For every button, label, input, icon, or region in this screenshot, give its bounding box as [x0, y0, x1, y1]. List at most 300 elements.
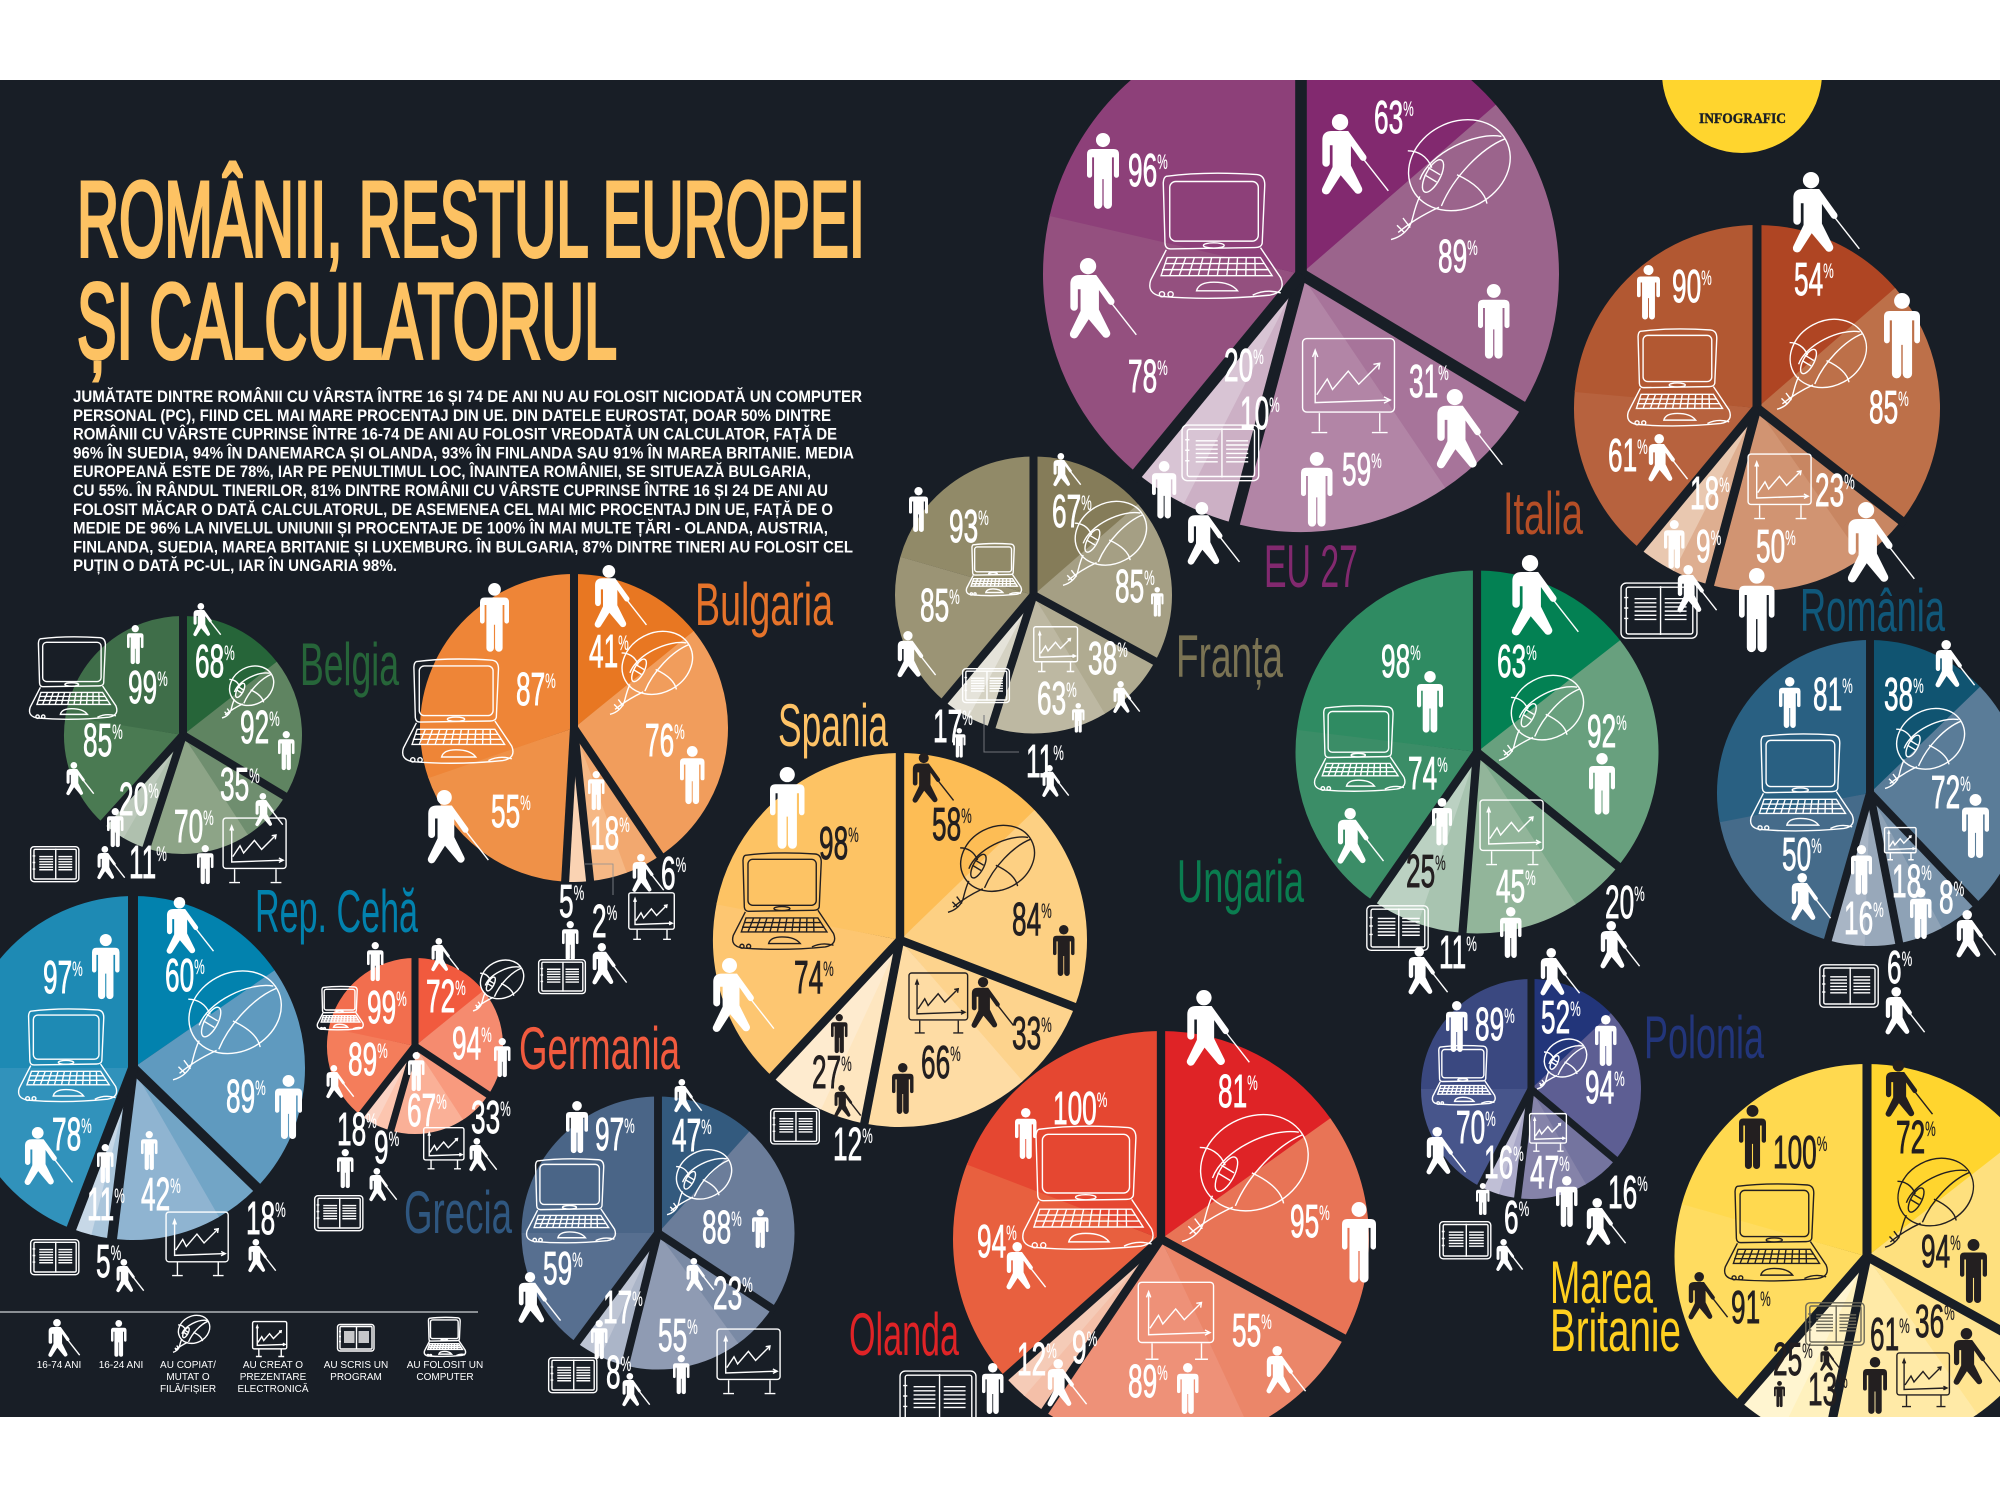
legend item: 16-74 ani [37, 1319, 81, 1371]
Rep. Cehă percentages: % [114, 1185, 125, 1208]
Polonia percentages: 16 [1484, 1136, 1513, 1188]
Bulgaria percentages: 87 [516, 663, 545, 715]
legend item: au copiat: MUTAT O [166, 1372, 210, 1383]
intro text block [73, 387, 862, 575]
România percentages: 6 [1887, 941, 1902, 993]
Polonia percentages: 94 [1585, 1061, 1614, 1113]
Spania percentages: 98 [819, 817, 848, 869]
panel: Ungaria pie [1315, 555, 1645, 994]
Polonia percentages: % [1504, 1005, 1515, 1028]
Spania percentages: 84 [1012, 893, 1041, 945]
Marea Britanie percentages: % [1817, 1133, 1827, 1156]
România percentages: 72 [1931, 766, 1960, 818]
panel: Marea Britanie pie [1688, 1058, 2000, 1450]
Olanda icons [900, 990, 1376, 1426]
Grecia percentages: % [701, 1116, 712, 1139]
Belgia percentages: % [224, 642, 235, 665]
heading: Germania: Germania [519, 1015, 680, 1082]
Franța percentages: % [949, 586, 960, 609]
Ungaria percentages: % [1410, 642, 1421, 665]
România percentages: 8 [1939, 871, 1954, 923]
Germania percentages: 9 [374, 1121, 389, 1173]
Olanda percentages: % [1097, 1089, 1107, 1112]
Polonia percentages: 52 [1541, 991, 1570, 1043]
Marea Britanie wedges [1731, 1058, 2000, 1450]
Germania percentages [337, 970, 511, 1173]
Ungaria percentages: 74 [1408, 747, 1437, 799]
EU 27 percentages: % [1253, 346, 1264, 369]
Germania percentages: % [481, 1024, 492, 1047]
Franța wedges [936, 452, 1159, 731]
România percentages: 16 [1844, 892, 1873, 944]
Franța percentages: 67 [1052, 485, 1081, 537]
intro text block: PUȚIN O DATĂ PC-UL, IAR ÎN UNGARIA 98%. [73, 556, 397, 575]
Ungaria percentages: % [1634, 883, 1645, 906]
intro text block: FOLOSIT MĂCAR O DATĂ CALCULATORUL, DE ASEMENEA CEL MAI MIC PROCENTAJ DIN UE, FAȚĂ DE O [73, 500, 833, 519]
Franța percentages: 85 [920, 579, 949, 631]
Grecia percentages: % [624, 1115, 635, 1138]
Marea Britanie percentages: 25 [1773, 1333, 1802, 1385]
Bulgaria percentages: % [676, 854, 686, 877]
Rep. Cehă percentages: 18 [246, 1192, 275, 1244]
România percentages: 81 [1813, 668, 1842, 720]
Bulgaria percentages: % [607, 902, 617, 925]
Polonia percentages: 89 [1475, 998, 1504, 1050]
Italia percentages: 18 [1690, 467, 1719, 519]
intro text block: MEDIE DE 96% LA NIVELUL UNIUNII ȘI PROCENTAJE DE 100% ÎN MAI MULTE ȚĂRI - OLANDA, AUSTRIA, [73, 519, 828, 538]
Polonia percentages: 47 [1530, 1146, 1559, 1198]
Italia percentages: 90 [1672, 260, 1701, 312]
heading: Ungaria: Ungaria [1177, 848, 1304, 915]
Polonia percentages: 6 [1504, 1191, 1519, 1243]
Marea Britanie percentages: % [1802, 1340, 1813, 1363]
Bulgaria percentages: 76 [645, 714, 674, 766]
title [77, 159, 865, 381]
heading: Spania: Spania [778, 692, 888, 759]
Ungaria icons [1315, 555, 1640, 994]
Germania percentages: % [366, 1110, 377, 1133]
heading: Marea Britanie: Marea [1550, 1249, 1653, 1316]
Italia percentages: % [1823, 260, 1834, 283]
Bulgaria percentages: % [574, 882, 584, 905]
Germania percentages: 89 [348, 1033, 377, 1085]
Italia percentages: 9 [1696, 520, 1711, 572]
Italia percentages: 61 [1608, 429, 1637, 481]
Marea Britanie percentages: % [1760, 1288, 1771, 1311]
Italia percentages: % [1898, 388, 1909, 411]
panel: Polonia pie [1426, 948, 1648, 1271]
EU 27 percentages: % [1269, 394, 1280, 417]
Italia percentages: % [1701, 267, 1712, 290]
România percentages: % [1913, 675, 1924, 698]
România percentages: 50 [1782, 828, 1811, 880]
legend item: au copiat: AU COPIAT/ [160, 1360, 216, 1371]
Rep. Cehă percentages: % [81, 1115, 92, 1138]
Spania percentages: % [862, 1125, 873, 1148]
Rep. Cehă percentages: 5 [96, 1235, 111, 1287]
Bulgaria percentages: 41 [589, 625, 618, 677]
Rep. Cehă percentages: % [255, 1077, 266, 1100]
Polonia wedges [1453, 976, 1618, 1201]
legend item: au copiat: FILĂ/FIȘIER [160, 1382, 216, 1395]
Franța percentages: % [962, 707, 973, 730]
Polonia percentages: % [1637, 1173, 1648, 1196]
Rep. Cehă percentages: % [275, 1199, 286, 1222]
heading: Grecia: Grecia [404, 1179, 512, 1246]
Grecia percentages: % [742, 1274, 753, 1297]
Grecia percentages: 88 [702, 1201, 731, 1253]
Franța percentages: % [1066, 679, 1077, 702]
Rep. Cehă percentages: 11 [87, 1178, 114, 1230]
Olanda percentages: 89 [1128, 1355, 1157, 1407]
Italia percentages: 85 [1869, 381, 1898, 433]
Olanda percentages: 94 [977, 1215, 1006, 1267]
Belgia percentages: % [203, 807, 214, 830]
Ungaria percentages: 92 [1587, 705, 1616, 757]
Rep. Cehă percentages: % [72, 958, 83, 981]
Marea Britanie percentages [1731, 1111, 1961, 1415]
Italia percentages: 50 [1756, 520, 1785, 572]
Polonia percentages: % [1614, 1068, 1625, 1091]
Marea Britanie percentages: 72 [1896, 1111, 1925, 1163]
Olanda percentages: % [1046, 1340, 1057, 1363]
Italia wedges [1628, 220, 1906, 590]
Polonia percentages: % [1570, 998, 1581, 1021]
România percentages: 18 [1892, 855, 1921, 907]
heading: Franța: Franța [1176, 623, 1283, 690]
Spania percentages: % [1041, 1014, 1052, 1037]
Polonia percentages: % [1559, 1153, 1570, 1176]
Bulgaria percentages: % [520, 792, 531, 815]
Spania percentages: 33 [1012, 1007, 1041, 1059]
Bulgaria percentages: 55 [491, 785, 520, 837]
legend item: 16-24 ani [99, 1320, 143, 1371]
Grecia percentages: 17 [603, 1281, 632, 1333]
Grecia percentages: 8 [606, 1346, 621, 1398]
Grecia percentages: % [687, 1316, 698, 1339]
legend item: au copiat [160, 1310, 216, 1395]
Ungaria wedges [1349, 565, 1622, 938]
Bulgaria wedges [466, 569, 682, 886]
Bulgaria percentages: 2 [592, 895, 607, 947]
Olanda percentages: 12 [1017, 1333, 1046, 1385]
Spania wedges [768, 747, 1080, 1129]
panel: Bulgaria pie [403, 565, 704, 994]
Rep. Cehă percentages: 97 [43, 951, 72, 1003]
Rep. Cehă percentages: % [170, 1175, 181, 1198]
EU 27 wedges [1119, 8, 1529, 531]
title: ROMÂNII, RESTUL EUROPEI [77, 159, 865, 279]
Bulgaria percentages: % [674, 721, 685, 744]
Spania percentages: % [848, 824, 859, 847]
Spania percentages: 74 [794, 951, 823, 1003]
Olanda percentages: % [1261, 1311, 1272, 1334]
Germania icons [315, 938, 531, 1231]
Grecia percentages: 55 [658, 1309, 687, 1361]
Olanda percentages: 55 [1232, 1304, 1261, 1356]
Germania percentages: 94 [452, 1017, 481, 1069]
Marea Britanie percentages: % [1899, 1315, 1910, 1338]
Franța percentages [920, 485, 1155, 787]
Franța percentages: 85 [1115, 560, 1144, 612]
Italia percentages: % [1785, 527, 1796, 550]
Franța percentages: % [978, 507, 989, 530]
Belgia percentages: % [249, 765, 260, 788]
Belgia percentages: 85 [83, 714, 112, 766]
intro text block: 96% ÎN SUEDIA, 94% ÎN DANEMARCA ȘI OLANDA, 93% ÎN FINLANDA SAU 91% ÎN MAREA BRITANIE. MEDIA [73, 443, 854, 462]
Germania percentages: % [436, 1091, 447, 1114]
title: ȘI CALCULATORUL [77, 261, 617, 381]
Rep. Cehă icons [19, 897, 302, 1292]
Belgia percentages: 70 [174, 800, 203, 852]
România percentages: % [1921, 862, 1932, 885]
Olanda percentages: 81 [1218, 1065, 1247, 1117]
heading: Rep. Cehă: Rep. Cehă [255, 878, 418, 945]
Grecia percentages: 23 [713, 1267, 742, 1319]
Spania percentages: 66 [921, 1036, 950, 1088]
Ungaria percentages: 11 [1439, 926, 1466, 978]
România percentages: % [1902, 948, 1912, 971]
Franța percentages: % [1144, 567, 1155, 590]
Italia percentages: 54 [1794, 253, 1823, 305]
Belgia percentages [83, 635, 280, 888]
heading: Olanda: Olanda [849, 1301, 959, 1368]
badge: infografic [1662, 80, 1822, 153]
Olanda percentages: 9 [1072, 1321, 1087, 1373]
Grecia wedges [562, 1092, 775, 1369]
Spania percentages: 58 [932, 798, 961, 850]
Polonia percentages: % [1485, 1108, 1496, 1131]
EU 27 percentages: 59 [1342, 443, 1371, 495]
Germania percentages: % [455, 977, 466, 1000]
Spania percentages: 27 [812, 1046, 841, 1098]
badge: infografic: INFOGRAFIC [1699, 111, 1786, 127]
Germania percentages: 18 [337, 1103, 366, 1155]
Germania percentages: % [377, 1040, 388, 1063]
Marea Britanie percentages: 36 [1915, 1295, 1944, 1347]
Belgia percentages: 68 [195, 635, 224, 687]
Polonia percentages: 70 [1456, 1101, 1485, 1153]
Marea Britanie percentages: % [1837, 1370, 1848, 1393]
EU 27 percentages: % [1157, 151, 1168, 174]
Franța percentages: % [1081, 492, 1092, 515]
heading: EU 27: EU 27 [1264, 533, 1358, 600]
Germania percentages: % [500, 1098, 511, 1121]
EU 27 percentages: 10 [1240, 387, 1269, 439]
Marea Britanie percentages: % [1950, 1232, 1961, 1255]
Rep. Cehă percentages: % [194, 956, 205, 979]
Grecia percentages: 59 [543, 1242, 572, 1294]
Marea Britanie percentages: 94 [1921, 1225, 1950, 1277]
Italia percentages [1608, 253, 1909, 572]
Belgia percentages: % [148, 780, 159, 803]
Ungaria percentages: 45 [1496, 860, 1525, 912]
Belgia icons [30, 603, 294, 884]
heading: Belgia: Belgia [300, 631, 399, 698]
Franța percentages: % [1053, 742, 1064, 765]
Grecia percentages: % [632, 1288, 643, 1311]
legend item: 16-74 ani: 16-74 ANI [37, 1360, 81, 1371]
Ungaria percentages: 25 [1406, 845, 1435, 897]
Marea Britanie percentages: 61 [1870, 1308, 1899, 1360]
legend item: au folosit computer: AU FOLOSIT UN [407, 1360, 483, 1371]
legend item: au creat prezentare: ELECTRONICĂ [237, 1382, 309, 1395]
Spania percentages: 12 [833, 1118, 862, 1170]
legend item: au folosit computer [407, 1317, 483, 1383]
panel: Germania pie [315, 938, 531, 1231]
România percentages: % [1873, 899, 1884, 922]
Marea Britanie percentages: 100 [1773, 1126, 1817, 1178]
legend item: au scris program: AU SCRIS UN [324, 1360, 388, 1371]
Rep. Cehă percentages: 78 [52, 1108, 81, 1160]
intro text block: PERSONAL (PC), FIIND CEL MAI MARE PROCENTAJ DIN UE. DIN DATELE EUROSTAT, DOAR 50% DINTRE [73, 406, 831, 425]
Rep. Cehă percentages [43, 949, 286, 1287]
România percentages: % [1842, 675, 1853, 698]
România percentages [1782, 668, 1971, 993]
Bulgaria percentages: % [618, 632, 629, 655]
Bulgaria percentages: % [545, 670, 556, 693]
Ungaria percentages: 20 [1605, 876, 1634, 928]
Franța percentages: 93 [949, 500, 978, 552]
Belgia percentages: 99 [128, 661, 157, 713]
Olanda percentages: 95 [1290, 1195, 1319, 1247]
EU 27 percentages: 89 [1438, 230, 1467, 282]
legend item: au creat prezentare: AU CREAT O [243, 1360, 303, 1371]
intro text block: JUMĂTATE DINTRE ROMÂNII CU VÂRSTA ÎNTRE 16 ȘI 74 DE ANI NU AU FOLOSIT NICIODATĂ UN COMPUTER [73, 387, 862, 406]
Germania percentages: 67 [407, 1084, 436, 1136]
Polonia percentages: % [1519, 1198, 1529, 1221]
intro text block: EUROPEANĂ ESTE DE 78%, IAR PE PENULTIMUL LOC, ÎNAINTEA ROMÂNIEI, SE SITUEAZĂ BULGARIA, [73, 462, 811, 481]
Spania icons [713, 753, 1074, 1144]
România icons [1751, 640, 1996, 1034]
Germania percentages: % [396, 988, 407, 1011]
Rep. Cehă percentages: % [111, 1242, 121, 1265]
Marea Britanie percentages: % [1925, 1118, 1936, 1141]
Ungaria percentages: % [1525, 867, 1536, 890]
panel: Grecia pie [519, 1079, 780, 1406]
Spania percentages: % [950, 1043, 961, 1066]
EU 27 percentages [1128, 91, 1478, 495]
legend item: au folosit computer: COMPUTER [416, 1372, 474, 1383]
Olanda wedges [1001, 1025, 1349, 1417]
panel: Spania pie [713, 747, 1080, 1170]
Franța percentages: 63 [1037, 672, 1066, 724]
Rep. Cehă percentages: 89 [226, 1070, 255, 1122]
Belgia percentages: 11 [129, 836, 156, 888]
Germania percentages: 99 [367, 981, 396, 1033]
EU 27 icons [1070, 102, 1526, 565]
panel: Italia pie [1608, 172, 1920, 652]
România percentages: % [1954, 878, 1964, 901]
Bulgaria percentages: % [619, 814, 630, 837]
Marea Britanie percentages: % [1944, 1302, 1955, 1325]
Ungaria percentages: % [1435, 852, 1446, 875]
Belgia percentages: 35 [220, 758, 249, 810]
panel: Belgia pie [30, 603, 294, 888]
Belgia percentages: % [156, 843, 167, 866]
Italia percentages: 23 [1815, 464, 1844, 516]
Marea Britanie percentages: 91 [1731, 1281, 1760, 1333]
Grecia percentages: % [572, 1249, 583, 1272]
Spania percentages: % [961, 805, 972, 828]
Polonia percentages [1456, 991, 1648, 1243]
Franța percentages: 11 [1026, 735, 1053, 787]
panel: România pie [1751, 635, 1996, 1034]
panel: Franța pie [897, 452, 1164, 797]
EU 27 percentages: % [1157, 357, 1168, 380]
EU 27 percentages: % [1467, 237, 1478, 260]
Polonia icons [1426, 948, 1626, 1271]
Ungaria percentages: % [1437, 754, 1448, 777]
Italia percentages: % [1711, 527, 1721, 550]
Italia icons [1621, 172, 1920, 652]
heading: Polonia: Polonia [1644, 1004, 1764, 1071]
Germania percentages: % [389, 1128, 399, 1151]
Olanda percentages: % [1006, 1222, 1017, 1245]
EU 27 percentages: 63 [1374, 91, 1403, 143]
Polonia percentages: % [1513, 1143, 1524, 1166]
Bulgaria percentages: 5 [559, 875, 574, 927]
Germania percentages: 72 [426, 970, 455, 1022]
Ungaria percentages: % [1526, 642, 1537, 665]
Olanda percentages: 100 [1053, 1082, 1097, 1134]
Grecia percentages: % [731, 1208, 742, 1231]
panel: Olanda pie [900, 990, 1376, 1426]
intro text block: CU 55%. ÎN RÂNDUL TINERILOR, 81% DINTRE ROMÂNII CU VÂRSTE CUPRINSE ÎNTRE 16 ȘI 24 DE ANI AU [73, 481, 828, 500]
heading: Marea Britanie [1550, 1249, 1681, 1364]
legend [0, 1310, 483, 1395]
Olanda percentages: % [1247, 1072, 1258, 1095]
Olanda percentages: % [1087, 1328, 1097, 1351]
EU 27 percentages: % [1371, 450, 1382, 473]
Franța percentages: % [1117, 639, 1128, 662]
EU 27 percentages: % [1438, 362, 1449, 385]
Ungaria percentages: % [1466, 933, 1477, 956]
Franța percentages: 38 [1088, 632, 1117, 684]
Marea Britanie percentages: 13 [1808, 1363, 1837, 1415]
Belgia wedges [99, 612, 288, 852]
Rep. Cehă percentages: 42 [141, 1168, 170, 1220]
Marea Britanie icons [1688, 1060, 2000, 1414]
legend item: 16-24 ani: 16-24 ANI [99, 1360, 143, 1371]
Spania percentages: % [1041, 900, 1052, 923]
Belgia percentages: 92 [240, 701, 269, 753]
Franța percentages: 17 [933, 700, 962, 752]
Franța callout line [984, 715, 1019, 752]
legend item: au creat prezentare: PREZENTARE [240, 1372, 307, 1383]
Belgia percentages: % [269, 708, 280, 731]
Belgia percentages: 20 [119, 773, 148, 825]
Italia percentages: % [1719, 474, 1730, 497]
Ungaria percentages: % [1616, 712, 1627, 735]
heading: Bulgaria: Bulgaria [695, 571, 833, 638]
panel: Rep. Cehă pie [11, 891, 302, 1292]
Grecia icons [519, 1079, 780, 1406]
Spania percentages: % [823, 958, 834, 981]
Grecia percentages: % [621, 1353, 631, 1376]
EU 27 percentages: 20 [1224, 339, 1253, 391]
Italia percentages: % [1637, 436, 1648, 459]
Grecia percentages: 97 [595, 1108, 624, 1160]
România percentages: % [1811, 835, 1822, 858]
EU 27 percentages: % [1403, 98, 1414, 121]
Spania percentages [794, 798, 1052, 1170]
Italia percentages: % [1844, 471, 1855, 494]
Ungaria percentages: 98 [1381, 635, 1410, 687]
Rep. Cehă percentages: 60 [165, 949, 194, 1001]
Bulgaria callout line [585, 864, 613, 895]
Bulgaria icons [403, 565, 704, 994]
